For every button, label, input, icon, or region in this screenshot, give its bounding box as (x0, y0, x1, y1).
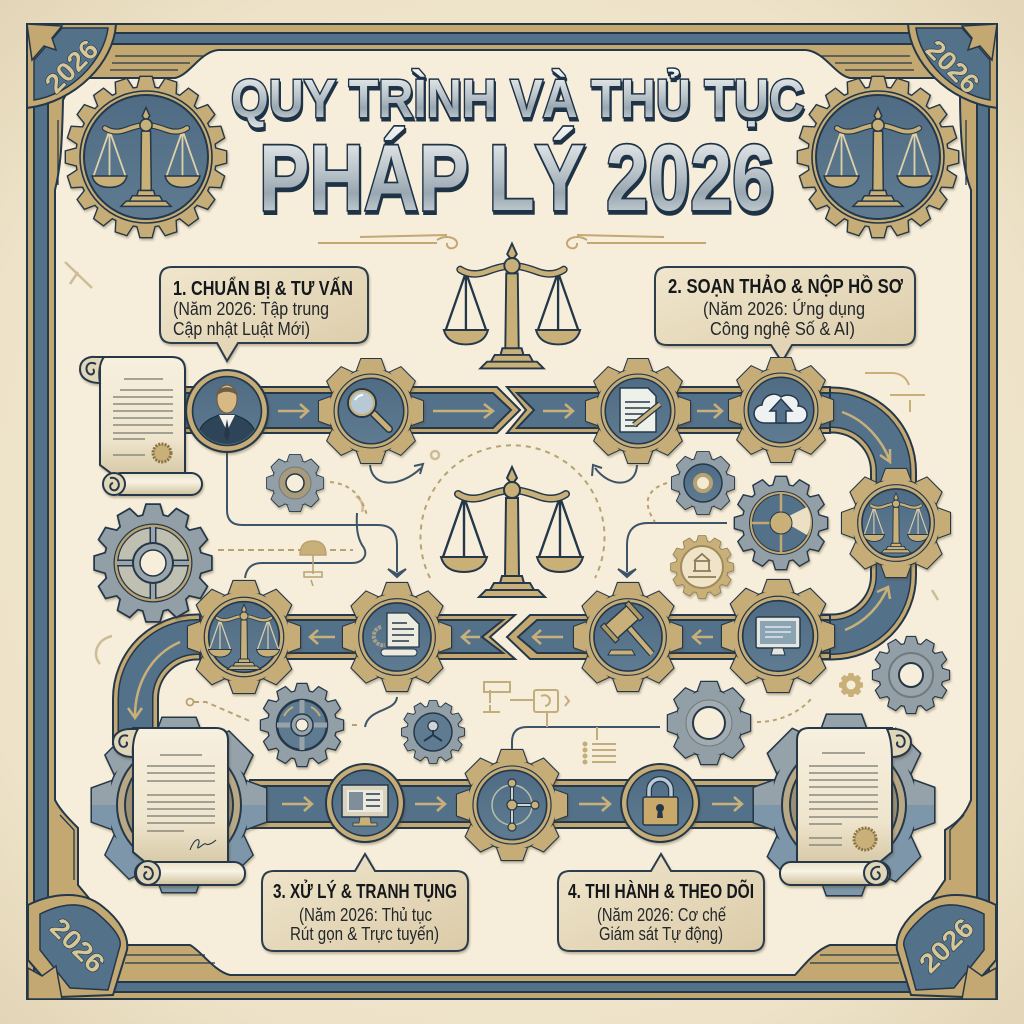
step: scales gear right (842, 469, 950, 577)
title: QUY TRÌNH VÀ THỦ TỤC (231, 69, 804, 129)
steel gear with node figure (402, 701, 464, 763)
big gear behind right document (754, 715, 934, 895)
decorative circuit lines upper right (865, 373, 925, 412)
step: network gear (457, 750, 567, 860)
corner badge: top left 2026: 2026 (39, 34, 104, 99)
steel gear with blue core (672, 452, 734, 514)
step: gavel gear (574, 583, 682, 691)
corner badge: bottom right 2026: 2026 (913, 912, 980, 979)
callout 3 (262, 854, 468, 951)
callout 3: Rút gọn & Trực tuyến) (290, 924, 439, 944)
step: monitor ring (325, 763, 405, 843)
callout 4: Giám sát Tự động) (599, 924, 723, 944)
callout 3: (Năm 2026: Thủ tục (299, 905, 432, 925)
gold gear with building (671, 536, 733, 598)
direction arrows on belts (128, 404, 890, 811)
callout 3: 3. XỬ LÝ & TRANH TỤNG (273, 879, 457, 903)
step: person ring (185, 369, 269, 453)
callout 4: (Năm 2026: Cơ chế (597, 905, 726, 925)
scales icon middle centre (441, 467, 583, 597)
parchment stains (65, 262, 938, 664)
medallion gear right with scales (798, 77, 958, 237)
tiny gold gear (839, 673, 863, 697)
step: document edit gear (586, 359, 690, 463)
callout 1: Cập nhật Luật Mới) (173, 319, 310, 339)
scroll top left (80, 357, 202, 495)
step: documents gear (343, 583, 451, 691)
step: monitor gear (722, 580, 834, 692)
callout 4: 4. THI HÀNH & THEO DÕI (568, 879, 754, 903)
scales icon upper centre (444, 244, 580, 368)
callout 2 (655, 267, 915, 362)
step: magnifier gear (319, 359, 423, 463)
step: scales gear left (188, 581, 300, 693)
corner badge: top right 2026: 2026 (920, 34, 985, 99)
process belt: curved sections (136, 410, 894, 745)
scroll bottom right with seal (780, 728, 911, 885)
callout 2: Công nghệ Số & AI) (710, 319, 855, 339)
connector lines and dashed trails (186, 453, 812, 750)
callout 1: 1. CHUẨN BỊ & TƯ VẤN (173, 277, 353, 300)
step: lock ring (620, 763, 700, 843)
scroll bottom left with signature (113, 728, 245, 885)
icon: list (582, 742, 616, 764)
callout 1: (Năm 2026: Tập trung (173, 299, 329, 319)
big gear behind left document (92, 718, 266, 892)
corner badge: bottom right 2026 (897, 895, 996, 999)
steel gear lower right (873, 637, 949, 713)
corner badge: bottom left 2026: 2026 (44, 912, 111, 979)
medallion gear left with scales (66, 77, 226, 237)
corner badge: top right 2026 (908, 24, 997, 108)
callout 1 (160, 267, 368, 361)
title (231, 69, 804, 230)
steel gear with hole (668, 682, 750, 764)
corner badge: bottom left 2026 (28, 895, 127, 999)
steel gear with quadrants (261, 684, 343, 766)
corner badge: top left 2026 (27, 24, 116, 108)
icon cluster: small flow boxes (483, 682, 597, 740)
callout 2: (Năm 2026: Ứng dụng (703, 298, 865, 319)
title flourish right (567, 235, 706, 248)
steel gear small (267, 455, 323, 511)
process belt: straight sections with chevrons (185, 387, 830, 828)
callout 2: 2. SOẠN THẢO & NỘP HỒ SƠ (668, 274, 904, 298)
title: PHÁP LÝ 2026 (259, 125, 774, 230)
steel gear with pie wheel (735, 477, 827, 569)
callout 4 (558, 854, 764, 951)
title flourish left (318, 235, 457, 248)
step: cloud upload gear (729, 358, 833, 462)
icon: small pin marker (300, 541, 326, 586)
steel gear large wheel (95, 505, 211, 621)
dashed circle around centre scales (420, 445, 604, 578)
